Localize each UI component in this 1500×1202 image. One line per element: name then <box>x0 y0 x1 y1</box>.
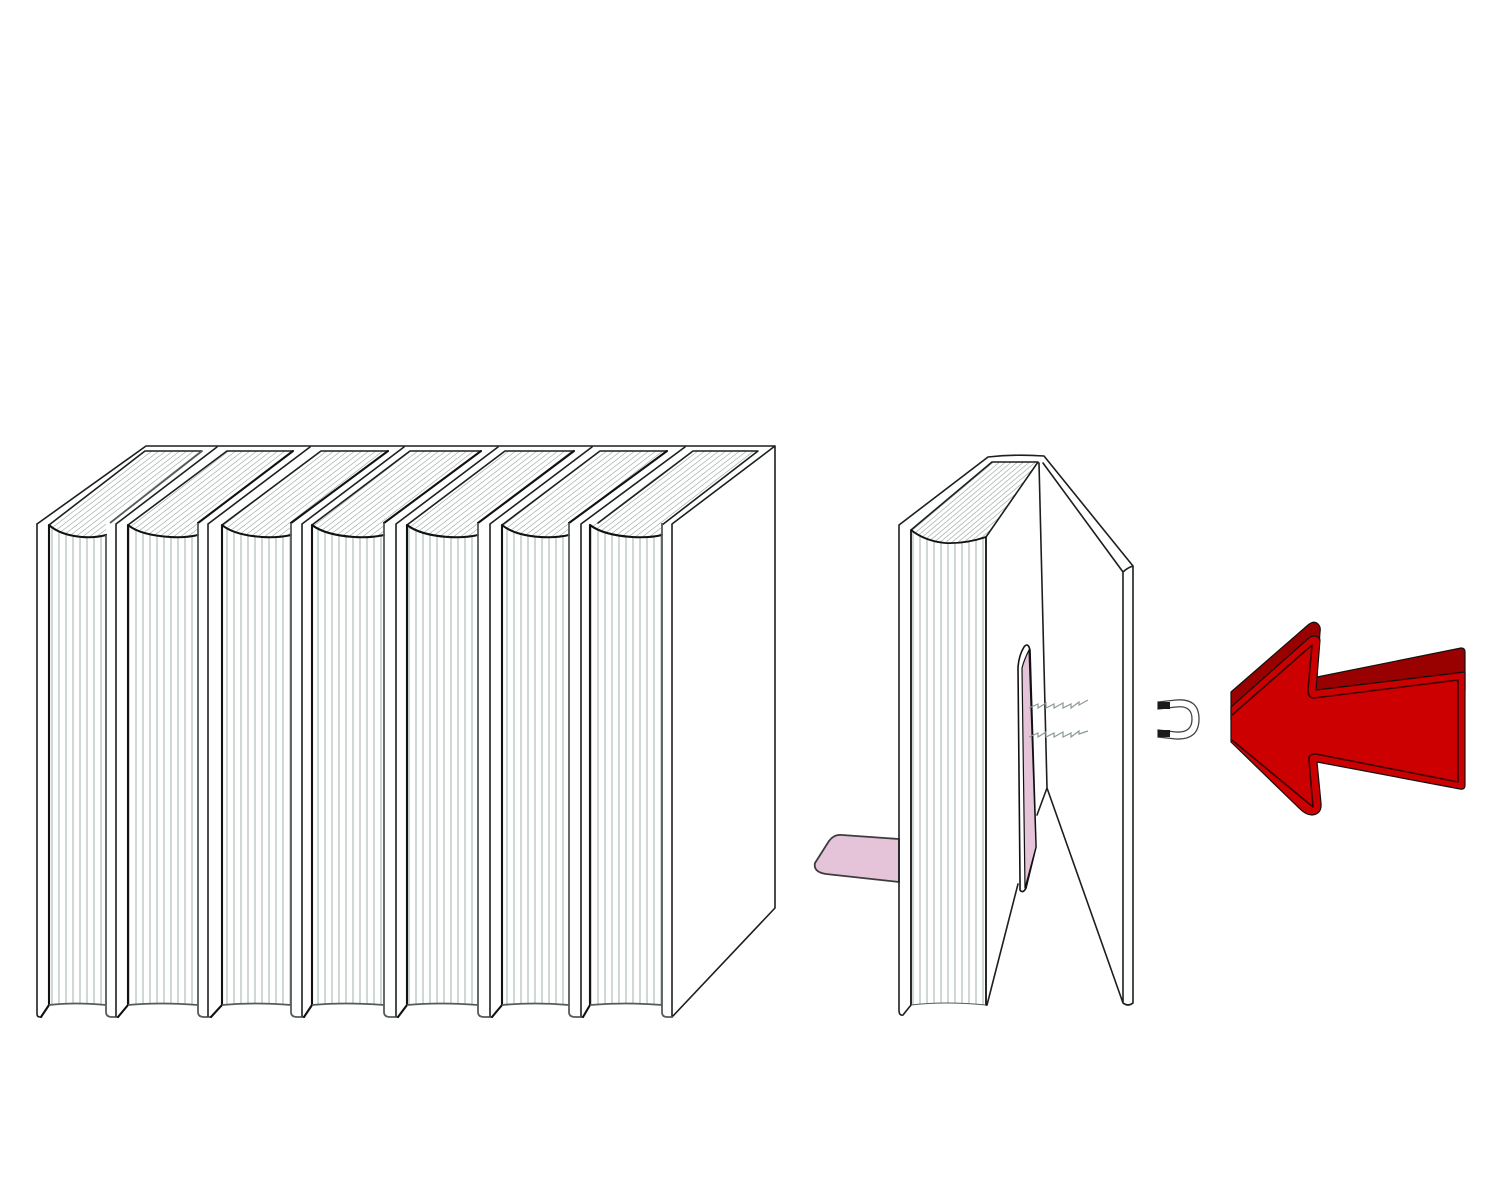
page block <box>911 530 986 1005</box>
book 1 <box>37 451 202 1017</box>
bookmark tab protruding behind open book <box>815 835 899 882</box>
arrow front face <box>1231 636 1465 815</box>
book 5 <box>396 447 574 1017</box>
row of seven books <box>37 446 775 1017</box>
icon: horseshoe magnet <box>1158 700 1199 739</box>
arrow inner contour <box>1232 645 1458 807</box>
book outer cover outline <box>37 446 775 1017</box>
bookmark inside book <box>1018 645 1036 892</box>
book 3 <box>208 447 388 1017</box>
cover and page outlines <box>899 455 1133 1015</box>
magnetic attraction waves <box>1029 700 1088 737</box>
book 6 <box>490 447 667 1017</box>
page top hatch <box>911 462 1038 543</box>
book 7 <box>581 447 758 1017</box>
red arrow pointing left <box>1231 622 1465 815</box>
open book <box>899 455 1133 1015</box>
book 2 <box>116 447 293 1017</box>
book 4 <box>302 447 481 1017</box>
arrow rear dark face <box>1231 622 1465 720</box>
